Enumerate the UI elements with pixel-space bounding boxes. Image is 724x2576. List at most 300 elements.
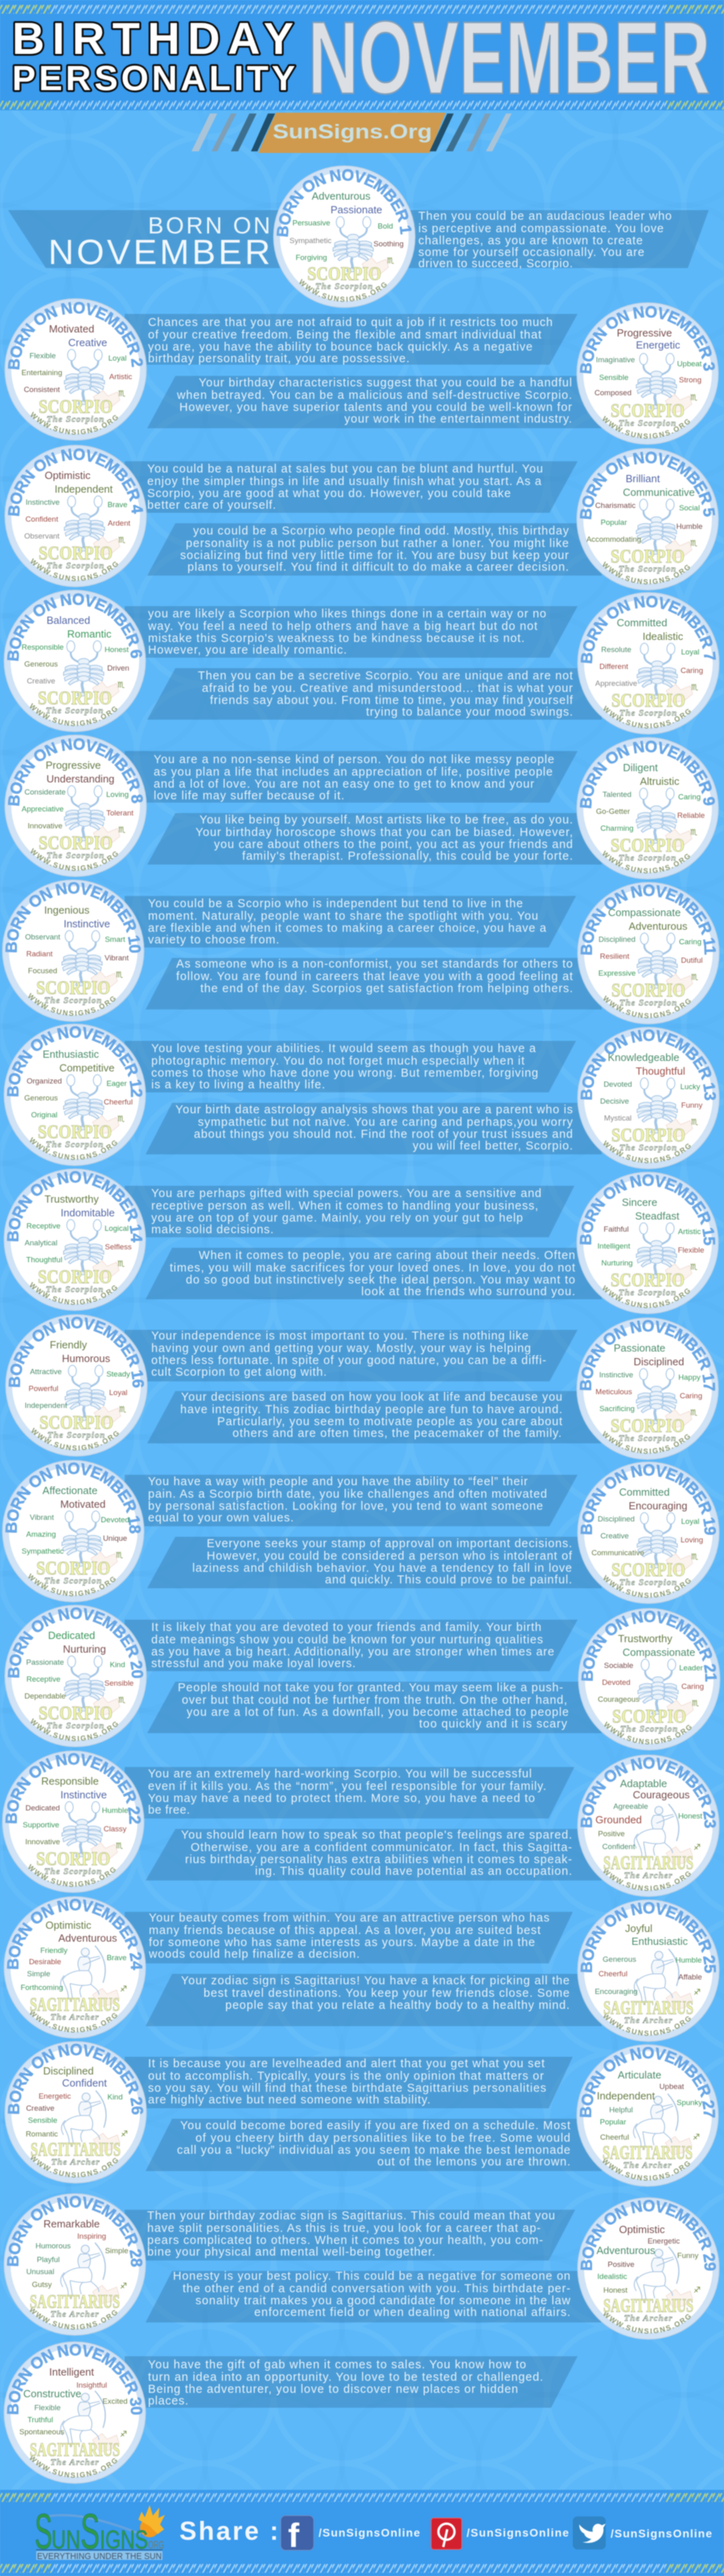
title: Birthday Personality: BIRTHDAY xyxy=(12,13,294,64)
badge: November 26: Kind xyxy=(107,2093,123,2102)
badge: November 10: Instinctive xyxy=(64,918,110,930)
badge: November 25: Encouraging xyxy=(594,1988,638,1996)
text band: November 8 xyxy=(125,751,578,803)
badge: November 16: SCORPIO xyxy=(39,1413,113,1434)
badge: November 3: BORN ON NOVEMBER 3 xyxy=(579,306,716,374)
badge: November 30: ♐ xyxy=(120,2430,127,2439)
text band: November 10: moment. Naturally, people want to share the spotlight with you. You xyxy=(148,910,538,923)
icon: Facebook xyxy=(281,2516,314,2554)
badge: November 7: Loyal xyxy=(681,648,699,657)
badge: November 29: ♐ xyxy=(693,2286,701,2295)
badge: November 15 xyxy=(577,1172,718,1314)
badge: November 17: Happy xyxy=(678,1373,701,1382)
badge: November 29: Positive xyxy=(607,2260,635,2269)
badge: November 22: Humble xyxy=(102,1806,128,1815)
badge: November 4: SCORPIO xyxy=(39,543,113,564)
badge: November 30: Excited xyxy=(102,2397,128,2406)
badge: November 12: Generous xyxy=(24,1094,58,1103)
badge: November 14: Logical xyxy=(105,1224,129,1233)
badge: November 30: The Archer xyxy=(51,2458,99,2467)
badge: November 25: WWW.SUNSIGNS.ORG xyxy=(602,2012,693,2037)
badge: November 25: Affable xyxy=(678,1973,702,1982)
banner: Born on November: some for yourself occasionally. You are xyxy=(418,246,644,259)
text band: November 30: turn an idea into an opportunity. You love to be tested or challenged. xyxy=(148,2372,543,2384)
badge: November 10 xyxy=(2,880,144,1022)
badge: November 10: ♏ xyxy=(116,971,123,980)
badge: November 16: BORN ON NOVEMBER 16 xyxy=(8,1316,145,1388)
logo: SunSigns.org: S xyxy=(35,2504,52,2560)
text band: November 19: laziness and childish behavior. You have a tendency to fall in love xyxy=(192,1562,572,1575)
text band: November 15: When it comes to people, you are caring about their needs. Often xyxy=(199,1249,575,1262)
badge: November 4: Independent xyxy=(55,483,113,495)
banner: Born on November: BORN ON xyxy=(148,213,270,239)
badge: November 1: ♏ xyxy=(387,257,394,266)
badge: November 30: Insightful xyxy=(76,2381,107,2390)
badge: November 9: Altruistic xyxy=(640,775,680,787)
text band: November 18: pain. As a Scorpio birth date, you like challenges and often motivated xyxy=(148,1488,547,1501)
badge: November 20: The Scorpion xyxy=(47,1721,105,1731)
badge: November 25 xyxy=(578,1900,719,2041)
badge: November 29: Optimistic xyxy=(619,2223,665,2235)
text band: November 20 xyxy=(125,1620,578,1671)
text band: November 11: follow. You are found in careers that leave you with a good feeling at xyxy=(176,971,573,984)
badge: November 21 xyxy=(578,1608,720,1750)
badge: November 19 xyxy=(578,1462,719,1604)
badge: November 13: WWW.SUNSIGNS.ORG xyxy=(603,1140,692,1164)
badge: November 12: Organized xyxy=(27,1077,62,1086)
badge: November 17: Disciplined xyxy=(634,1356,684,1368)
text band: November 16: having your own and getting your way. Mostly, your way is helping xyxy=(151,1343,531,1356)
badge: November 17: SCORPIO xyxy=(611,1416,685,1437)
badge: November 22: BORN ON NOVEMBER 22 xyxy=(3,1751,143,1824)
text band: November 24: Your beauty comes from within. You are an attractive person who has xyxy=(149,1912,549,1925)
badge: November 12: WWW.SUNSIGNS.ORG xyxy=(29,1137,117,1161)
badge: November 7: BORN ON NOVEMBER 7 xyxy=(580,596,716,664)
text band: November 17: Particularly, you seem to motivate people as you care about xyxy=(217,1415,562,1428)
badge: November 11: Caring xyxy=(679,938,701,947)
badge: November 27 xyxy=(577,2045,718,2186)
badge: November 5: The Scorpion xyxy=(619,564,677,574)
text band: November 4: Scorpio, you are good at what you do. However, you could take xyxy=(147,488,511,501)
badge: November 30: Constructive xyxy=(23,2388,81,2400)
badge: November 6: Balanced xyxy=(47,614,90,626)
badge: November 22: WWW.SUNSIGNS.ORG xyxy=(27,1863,117,1889)
text band: November 29: Honesty is your best policy. This could be a negative for someone on xyxy=(173,2270,570,2283)
text band: November 24 xyxy=(125,1912,573,1963)
badge: November 20: BORN ON NOVEMBER 20 xyxy=(6,1605,146,1678)
badge: November 16: The Scorpion xyxy=(47,1430,105,1440)
footer band xyxy=(0,2490,724,2576)
badge: November 15: Intelligent xyxy=(598,1242,631,1251)
badge: November 21: Leader xyxy=(679,1664,703,1673)
badge: November 17: Caring xyxy=(680,1392,702,1401)
badge: November 28: BORN ON NOVEMBER 28 xyxy=(5,2194,145,2267)
banner: Born on November: challenges, as you are known to create xyxy=(418,235,643,248)
badge: November 20: Dedicated xyxy=(48,1629,95,1641)
badge: November 4: Instinctive xyxy=(26,498,60,507)
text band: November 2 xyxy=(125,314,578,365)
badge: November 14: SCORPIO xyxy=(38,1267,112,1288)
badge: November 16: Humorous xyxy=(62,1352,110,1364)
badge: November 11: ♏ xyxy=(691,973,698,982)
badge: November 7 xyxy=(578,592,719,734)
badge: November 3: Progressive xyxy=(617,327,672,339)
badge: November 8: SCORPIO xyxy=(39,833,113,854)
Twitter handle: /SunSignsOnline xyxy=(611,2527,712,2540)
text band: November 29: enforcement field or when dealing with national affairs. xyxy=(254,2306,570,2319)
badge: November 21: WWW.SUNSIGNS.ORG xyxy=(603,1720,693,1746)
banner: Born on November xyxy=(8,210,709,272)
badge: November 10: Observant xyxy=(25,933,60,942)
badge: November 30 xyxy=(4,2342,146,2483)
badge: November 7: Resolute xyxy=(601,646,631,654)
badge: November 21: Caring xyxy=(681,1682,704,1691)
text band: November 3: when betrayed. You can be a malicious and self-destructive Scorpio. xyxy=(176,390,572,402)
badge: November 27: WWW.SUNSIGNS.ORG xyxy=(601,2157,692,2182)
badge: November 28: Gutsy xyxy=(32,2281,52,2289)
text band: November 21: too quickly and it is scary xyxy=(419,1718,568,1731)
badge: November 24: The Archer xyxy=(51,2013,99,2022)
badge: November 9 xyxy=(577,737,718,879)
badge: November 5: Charismatic xyxy=(595,502,636,510)
badge: November 29: Funny xyxy=(677,2252,698,2260)
badge: November 22: Innovative xyxy=(25,1838,60,1847)
text band: November 4: better care of yourself. xyxy=(147,499,276,512)
badge: November 12: Cheerful xyxy=(104,1098,133,1107)
badge: November 11: Disciplined xyxy=(599,935,636,944)
badge: November 6: WWW.SUNSIGNS.ORG xyxy=(29,703,117,726)
text band: November 18: equal to your own values. xyxy=(148,1512,294,1525)
badge: November 12: Competitive xyxy=(60,1062,114,1074)
badge: November 29 xyxy=(578,2198,719,2339)
badge: November 29: Adventurous xyxy=(597,2244,656,2256)
badge: November 30: WWW.SUNSIGNS.ORG xyxy=(28,2454,119,2479)
badge: November 24: BORN ON NOVEMBER 24 xyxy=(5,1897,145,1971)
badge: November 6: The Scorpion xyxy=(46,706,104,716)
badge: November 13: Knowledgeable xyxy=(608,1051,679,1063)
text band: November 26: so you say. You will find that these birthdate Sagittarius personalities xyxy=(148,2082,546,2095)
badge: November 19: BORN ON NOVEMBER 19 xyxy=(578,1462,718,1535)
title: Birthday Personality xyxy=(12,13,295,98)
title: Birthday Personality: PERSONALITY xyxy=(12,59,295,98)
text band: November 3: Your birthday characteristics suggest that you could be a handful xyxy=(199,377,572,390)
badge: November 8: ♏ xyxy=(118,826,125,835)
badge: November 10: Ingenious xyxy=(44,904,90,916)
text band: November 7: afraid to be you. Creative and misunderstood... that is what your xyxy=(202,683,573,696)
badge: November 5: WWW.SUNSIGNS.ORG xyxy=(602,561,690,584)
text band: November 13: about things you should not. Find the root of your trust issues and xyxy=(194,1129,573,1141)
text band: November 19: and quickly. This could prove to be painful. xyxy=(325,1574,572,1587)
badge: November 13: Decisive xyxy=(600,1097,629,1106)
badge: November 23: ♐ xyxy=(693,1843,701,1852)
text band: November 18 xyxy=(125,1475,578,1526)
badge: November 7: Appreciative xyxy=(595,679,637,688)
text band: November 27: You could become bored easily if you are fixed on a schedule. Most xyxy=(180,2120,570,2132)
badge: November 29: WWW.SUNSIGNS.ORG xyxy=(602,2310,693,2335)
badge: November 4: ♏ xyxy=(118,536,125,545)
badge: November 28: Simple xyxy=(105,2247,129,2256)
logo: SunSigns.org: UN xyxy=(51,2525,80,2554)
badge: November 25: Generous xyxy=(603,1955,636,1964)
badge: November 11: Dutiful xyxy=(681,956,702,965)
badge: November 5 xyxy=(577,448,718,590)
badge: November 1: BORN ON NOVEMBER 1 xyxy=(276,169,412,237)
badge: November 13: Mystical xyxy=(604,1114,631,1123)
badge: November 24: Adventurous xyxy=(58,1932,117,1944)
badge: November 23: WWW.SUNSIGNS.ORG xyxy=(602,1867,693,1893)
text band: November 28: pears complicated to others. When it comes to your health, you com- xyxy=(147,2235,543,2248)
text band: November 17: Your decisions are based on how you look at life and because you xyxy=(181,1391,562,1404)
badge: November 8: Progressive xyxy=(46,759,101,771)
badge: November 26: Energetic xyxy=(39,2092,71,2101)
badge: November 26: Sensible xyxy=(28,2116,57,2125)
badge: November 22: Classy xyxy=(104,1825,126,1834)
badge: November 23: Grounded xyxy=(595,1814,642,1826)
badge: November 24: Desirable xyxy=(29,1958,61,1967)
badge: November 2: Entertaining xyxy=(22,369,62,378)
text band: November 15: do so good but instinctively seek the ideal person. You may want to xyxy=(186,1274,575,1286)
badge: November 5: Humble xyxy=(677,522,702,531)
badge: November 4: Optimistic xyxy=(44,469,91,481)
badge: November 26: Creative xyxy=(26,2104,55,2113)
badge: November 10: Focused xyxy=(28,967,57,976)
text band: November 16: Your independence is most important to you. There is nothing like xyxy=(151,1330,529,1343)
text band: November 27: of you cheery birth day personalities like to be free. Some would xyxy=(195,2132,570,2145)
badge: November 25: Enthusiastic xyxy=(631,1935,689,1947)
badge: November 29: Idealistic xyxy=(598,2273,627,2281)
text band: November 24: many friends because of this appeal. As a lover, you are suited best xyxy=(149,1924,541,1937)
badge: November 13: ♏ xyxy=(691,1118,698,1127)
badge: November 21: Sociable xyxy=(604,1662,633,1670)
badge: November 1 xyxy=(274,166,415,308)
badge: November 9: The Scorpion xyxy=(619,853,677,863)
badge: November 4: The Scorpion xyxy=(47,561,105,571)
badge: November 17: The Scorpion xyxy=(619,1434,677,1443)
text band: November 5 xyxy=(147,523,602,576)
text band: November 12: photographic memory. You do not forget much especially when it xyxy=(151,1055,524,1067)
badge: November 9: Caring xyxy=(678,793,701,802)
badge: November 25: ♐ xyxy=(693,1988,701,1997)
badge: November 15: Flexible xyxy=(678,1246,704,1255)
badge: November 2: Motivated xyxy=(49,323,94,335)
badge: November 26: The Archer xyxy=(51,2157,100,2167)
text band: November 7: friends say about you. From time to time, you may find yourself xyxy=(210,694,574,707)
text band: November 7 xyxy=(147,668,602,720)
badge: November 9: Reliable xyxy=(677,811,705,820)
badge: November 16: ♏ xyxy=(119,1406,126,1414)
badge: November 17: BORN ON NOVEMBER 17 xyxy=(578,1318,718,1391)
badge: November 28 xyxy=(4,2194,146,2335)
badge: November 27: Upbeat xyxy=(660,2083,685,2091)
badge: November 22 xyxy=(2,1751,144,1893)
badge: November 29: The Archer xyxy=(624,2314,673,2323)
text band: November 28 xyxy=(125,2210,575,2260)
badge: November 21: ♏ xyxy=(692,1699,699,1708)
badge: November 22: Dedicated xyxy=(26,1804,60,1813)
badge: November 19: Communicative xyxy=(591,1549,644,1558)
badge: November 14: Analytical xyxy=(25,1239,57,1248)
text band: November 4: You could be a natural at sales but you can be blunt and hurtful. You xyxy=(147,463,543,476)
badge: November 21: Courageous xyxy=(598,1695,640,1704)
badge: November 30: Flexible xyxy=(35,2404,60,2413)
text band: November 14: receptive person as well. When it comes to handling your business, xyxy=(151,1199,538,1212)
badge: November 26: Romantic xyxy=(26,2130,58,2139)
badge: November 30: Truthful xyxy=(27,2416,53,2425)
badge: November 30: Intelligent xyxy=(49,2366,94,2378)
badge: November 2: Loyal xyxy=(109,354,126,363)
badge: November 20: WWW.SUNSIGNS.ORG xyxy=(29,1717,120,1743)
text band: November 6: mistake this Scorpio's weakness to be kindness because it is not. xyxy=(148,633,524,646)
badge: November 12: ♏ xyxy=(117,1115,125,1124)
badge: November 8: Loving xyxy=(106,791,129,799)
badge: November 9: Diligent xyxy=(623,762,658,774)
badge: November 10: Radiant xyxy=(27,950,53,959)
badge: November 19: Loyal xyxy=(681,1517,699,1526)
text band: November 18: by personal satisfaction. Looking for love, you tend to want someone xyxy=(148,1501,543,1513)
badge: November 18: Motivated xyxy=(60,1498,105,1510)
badge: November 3: Energetic xyxy=(636,339,681,351)
badge: November 8: Considerate xyxy=(24,788,66,797)
badge: November 28: WWW.SUNSIGNS.ORG xyxy=(28,2306,119,2331)
text band: November 4 xyxy=(125,461,578,513)
badge: November 9: BORN ON NOVEMBER 9 xyxy=(579,741,716,809)
badge: November 12: The Scorpion xyxy=(46,1140,104,1150)
badge: November 20 xyxy=(5,1605,146,1747)
badge: November 21: SCORPIO xyxy=(612,1707,686,1728)
text band: November 15 xyxy=(146,1248,602,1299)
badge: November 3 xyxy=(577,303,718,444)
text band: November 27 xyxy=(146,2119,602,2171)
badge: November 7: ♏ xyxy=(691,683,698,692)
badge: November 28: Playful xyxy=(37,2256,60,2264)
logo: SunSigns.org xyxy=(35,2504,165,2562)
text band: November 5: socializing but find very little time for it. You are busy but keep your xyxy=(180,549,569,562)
badge: November 8: Appreciative xyxy=(22,805,64,814)
badge: November 14: BORN ON NOVEMBER 14 xyxy=(6,1170,143,1243)
badge: November 17: Passionate xyxy=(614,1342,665,1354)
badge: November 4: WWW.SUNSIGNS.ORG xyxy=(31,558,119,581)
badge: November 1: Persuasive xyxy=(293,219,330,228)
text band: November 14: you are on top of your game. Mainly, you rely on your gut to help xyxy=(151,1212,523,1225)
badge: November 11: SCORPIO xyxy=(611,980,685,1001)
badge: November 24: Friendly xyxy=(40,1946,68,1955)
text band: November 22: You are an extremely hard-working Scorpio. You will be successful xyxy=(148,1768,532,1781)
site tag: SunSigns.Org xyxy=(191,113,512,153)
text band: November 29: the other end of a candid conversation with you. This birthdate per- xyxy=(183,2283,570,2296)
text band: November 30 xyxy=(125,2356,578,2408)
text band: November 11: As someone who is a non-conformist, you set standards for others to xyxy=(176,958,573,971)
text band: November 22: You may have a need to protect them. More so, you have a need to xyxy=(148,1792,535,1805)
badge: November 13: Thoughtful xyxy=(636,1065,685,1077)
badge: November 11: Compassionate xyxy=(608,906,681,919)
badge: November 14: Receptive xyxy=(27,1222,60,1231)
badge: November 2: BORN ON NOVEMBER 2 xyxy=(7,301,143,370)
badge: November 9: Talented xyxy=(603,791,631,799)
badge: November 25: The Archer xyxy=(624,2016,673,2025)
badge: November 26: Disciplined xyxy=(43,2065,93,2077)
badge: November 23: Agreeable xyxy=(613,1802,648,1811)
badge: November 29: Energetic xyxy=(648,2237,680,2246)
badge: November 19: Disciplined xyxy=(598,1515,635,1524)
badge: November 26: ♐ xyxy=(121,2130,128,2139)
badge: November 12: Original xyxy=(31,1111,57,1120)
badge: November 23: Honest xyxy=(678,1812,702,1821)
badge: November 29: BORN ON NOVEMBER 29 xyxy=(578,2198,718,2271)
badge: November 19: Encouraging xyxy=(629,1500,687,1512)
badge: November 3: The Scorpion xyxy=(619,419,677,428)
badge: November 13: Devoted xyxy=(603,1080,632,1089)
badge: November 1: Passionate xyxy=(331,204,382,216)
badge: November 1: Sympathetic xyxy=(290,237,331,246)
badge: November 7: Committed xyxy=(617,617,667,629)
banner: Born on November: is perceptive and compassionate. You love xyxy=(418,222,664,235)
badge: November 16: Steady xyxy=(106,1370,130,1379)
badge: November 2 xyxy=(5,299,146,440)
text band: November 12: is a key to living a healthy life. xyxy=(151,1079,325,1092)
badge: November 8: The Scorpion xyxy=(47,851,105,861)
badge: November 14: Thoughtful xyxy=(27,1256,62,1265)
badge: November 19: ♏ xyxy=(691,1553,698,1562)
badge: November 19: WWW.SUNSIGNS.ORG xyxy=(602,1574,693,1600)
badge: November 5: Communicative xyxy=(623,486,695,498)
badge: November 7: WWW.SUNSIGNS.ORG xyxy=(603,705,692,729)
text band: November 21: over but that could not be further from the truth. On the other hand, xyxy=(182,1694,567,1707)
badge: November 18: Unique xyxy=(103,1534,127,1543)
text band: November 12 xyxy=(125,1041,576,1092)
badge: November 26: Confident xyxy=(62,2077,107,2089)
text band: November 20: stressful and you make loyal lovers. xyxy=(151,1657,356,1670)
text band: November 8: as you plan a life that includes an appreciation of life, positive people xyxy=(154,766,553,779)
badge: November 3: Upbeat xyxy=(677,360,702,369)
badge: November 26: WWW.SUNSIGNS.ORG xyxy=(29,2153,120,2179)
badge: November 25: Humble xyxy=(676,1956,701,1965)
text band: November 23: rius birthday personality has extra abilities when it comes to speak- xyxy=(185,1853,572,1866)
badge: November 22: The Scorpion xyxy=(44,1867,102,1876)
badge: November 11: WWW.SUNSIGNS.ORG xyxy=(603,995,692,1019)
text band: November 17 xyxy=(147,1391,602,1443)
Facebook handle: /SunSignsOnline xyxy=(319,2526,420,2539)
badge: November 18: The Scorpion xyxy=(44,1576,102,1586)
badge: November 4 xyxy=(5,445,146,587)
badge: November 18 xyxy=(2,1460,144,1602)
text band: November 5: plans to yourself. You find it difficult to do make a career decision. xyxy=(187,561,569,574)
badge: November 25: Cheerful xyxy=(599,1970,627,1979)
badge: November 20: ♏ xyxy=(118,1696,125,1705)
badge: November 15: Nurturing xyxy=(601,1259,633,1268)
text band: November 20: as you have a big heart. Additionally, you are stronger when times are xyxy=(151,1645,554,1658)
badge: November 26: SAGITTARIUS xyxy=(31,2140,121,2161)
text band: November 7: trying to balance your mood swings. xyxy=(366,706,573,719)
text band: November 30: You have the gift of gab when it comes to sales. You know how to xyxy=(148,2359,526,2372)
badge: November 14: The Scorpion xyxy=(46,1285,104,1294)
text band: November 14: make solid decisions. xyxy=(151,1224,274,1236)
logo: SunSigns.org: EVERYTHING UNDER THE SUN xyxy=(37,2552,162,2562)
badge: November 2: SCORPIO xyxy=(39,397,113,418)
badge: November 11: BORN ON NOVEMBER 11 xyxy=(580,884,716,956)
text band: November 17: have integrity. This zodiac birthday people are fun to have around. xyxy=(180,1404,562,1417)
badge: November 3: Sensible xyxy=(599,374,628,382)
banner: Born on November: Then you could be an audacious leader who xyxy=(418,210,672,223)
badge: November 16: Attractive xyxy=(30,1368,62,1377)
badge: November 1: Adventurous xyxy=(312,190,371,202)
badge: November 24: SAGITTARIUS xyxy=(30,1995,120,2016)
badge: November 14 xyxy=(4,1169,146,1311)
text band: November 13: Your birth date astrology analysis shows that you are a parent who is xyxy=(175,1104,573,1117)
badge: November 30: BORN ON NOVEMBER 30 xyxy=(5,2342,145,2415)
text band: November 2: birthday personality trait, you are possessive. xyxy=(148,353,409,365)
text band: November 6: way. You feel a need to help others and have a big heart but do not xyxy=(147,620,537,633)
badge: November 27: Cheerful xyxy=(600,2133,629,2142)
